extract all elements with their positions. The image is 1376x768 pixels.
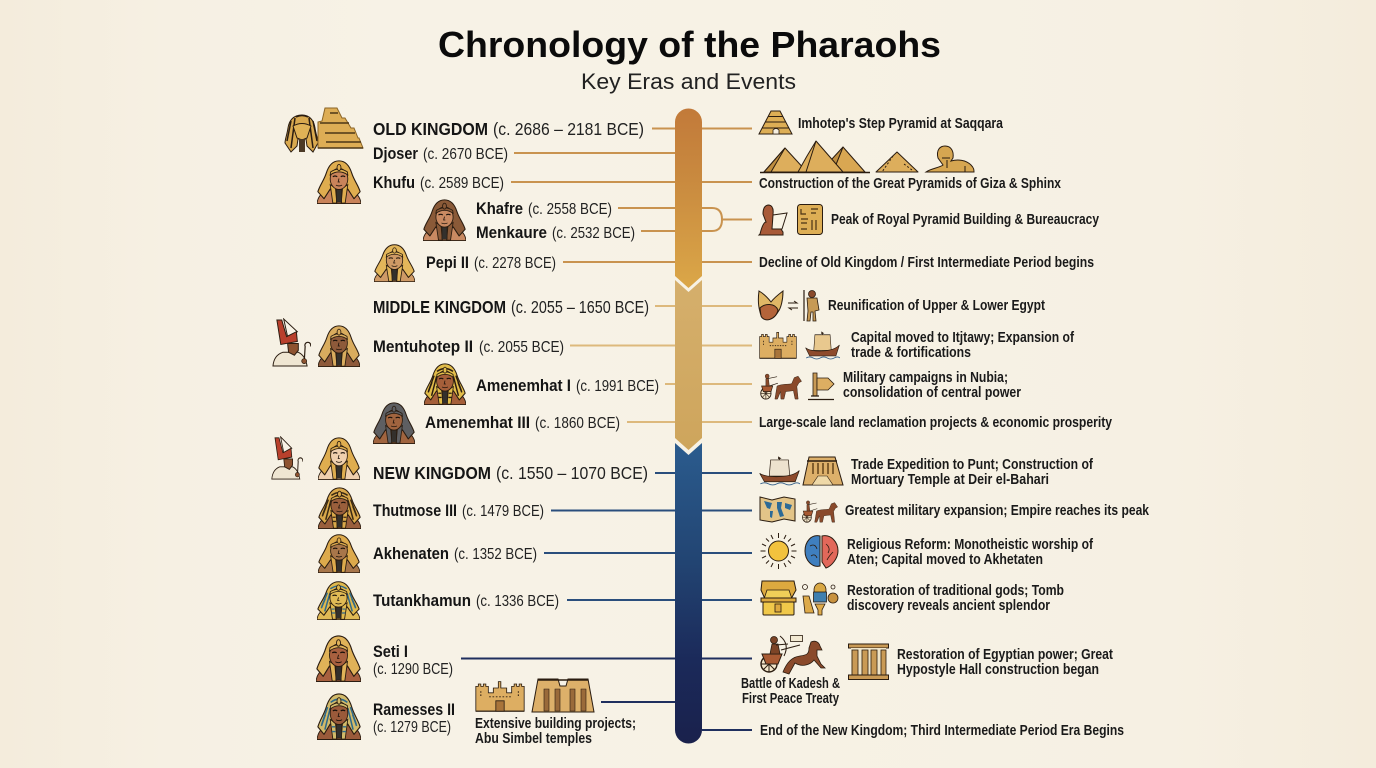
icon: sphinx: [926, 146, 974, 172]
label: Seti I: Seti I: [373, 643, 408, 661]
panel: New Kingdom pharaohs: [272, 437, 648, 747]
label: Pepi II: Pepi II: [426, 254, 469, 272]
label: Menkaure: Menkaure: [476, 224, 547, 242]
event: End of the New Kingdom: End of the New Kingdom; Third Intermediate Period Era Begins: [760, 723, 1124, 739]
icon: chariot attack: [802, 501, 838, 522]
era heading: Middle Kingdom: MIDDLE KINGDOM: [373, 297, 506, 317]
icon: crown figure New Kingdom: [272, 437, 303, 479]
icon: Amenemhat I: [424, 364, 466, 405]
event: Battle of Kadesh: First Peace Treaty: [742, 691, 839, 707]
label: Amenemhat I: [476, 377, 659, 395]
icon: papyrus tablet: [798, 204, 822, 234]
icon: sun: [760, 533, 796, 569]
event: Capital moved: trade & fortifications: [851, 345, 971, 361]
label: Amenemhat I: Amenemhat I: [476, 377, 571, 395]
icon: soldier: [804, 290, 819, 321]
era heading: Middle Kingdom: (c. 2055 – 1650 BCE): [511, 297, 649, 317]
label: Mentuhotep II: (c. 2055 BCE): [479, 339, 564, 356]
bar segment: New Kingdom: [675, 443, 702, 744]
icon: ship: [806, 331, 840, 359]
panel: Old Kingdom pharaohs: [285, 108, 644, 282]
icon: Hatshepsut: [318, 438, 360, 480]
icon: Punt ship: [760, 456, 800, 485]
label: Tutankhamun: (c. 1336 BCE): [476, 593, 559, 610]
icon: Khufu: [317, 161, 361, 204]
panel: Middle Kingdom events: [758, 290, 1112, 431]
label: Khufu: Khufu: [373, 174, 415, 192]
event: Restoration of Egyptian power: [897, 647, 1113, 678]
icon: fort Ramesses: [476, 682, 524, 711]
label: Ramesses II: [373, 701, 455, 736]
label: Khafre: [476, 200, 612, 218]
label: Menkaure: [476, 224, 635, 242]
event: Extensive building projects: Extensive building projects;: [475, 716, 636, 732]
era heading: Old Kingdom: OLD KINGDOM: [373, 119, 488, 139]
label: Seti I: [373, 643, 453, 678]
icon: Khafre: [423, 200, 466, 241]
label: Pepi II: [426, 254, 556, 272]
icon: hypostyle hall: [848, 644, 888, 680]
event: Military campaigns: consolidation of central power: [843, 385, 1021, 401]
label: Amenemhat III: Amenemhat III: [425, 414, 530, 432]
event: Trade Expedition: Trade Expedition to Punt; Construction of: [851, 457, 1093, 473]
era heading: Middle Kingdom: [373, 297, 649, 317]
event: Battle of Kadesh: Battle of Kadesh &: [741, 676, 840, 692]
icon: mortuary temple: [803, 457, 843, 485]
label: Menkaure: (c. 2532 BCE): [552, 225, 635, 242]
icon: treaty tablet: [790, 636, 802, 642]
label: Mentuhotep II: Mentuhotep II: [373, 338, 473, 356]
label: Tutankhamun: [373, 592, 559, 610]
event: Military campaigns: [843, 370, 1021, 401]
event: Peak of Royal Pyramid Building: Peak of Royal Pyramid Building & Bureaucracy: [831, 212, 1099, 228]
panel: Old Kingdom events: [759, 111, 1099, 271]
icon: fort: [760, 332, 796, 358]
icon: Thutmose III: [318, 488, 361, 529]
subtitle: Key Eras and Events: [581, 69, 796, 94]
panel: New Kingdom events: [741, 456, 1149, 739]
label: Seti I: (c. 1290 BCE): [373, 661, 453, 678]
connector lines: Middle Kingdom: [570, 306, 752, 422]
label: Djoser: [373, 145, 508, 163]
label: Amenemhat I: (c. 1991 BCE): [576, 378, 659, 395]
label: Amenemhat III: [425, 414, 620, 432]
label: Khufu: [373, 174, 504, 192]
icon: exchange arrows: [788, 301, 798, 310]
icon: Imhotep step pyramid: [759, 111, 792, 134]
event: Reunification: Reunification of Upper & Lower Egypt: [828, 298, 1045, 314]
event: Restoration of Egyptian power: Hypostyle Hall construction began: [897, 662, 1099, 678]
event: Land reclamation: Large-scale land reclamation projects & economic prosperity: [759, 415, 1112, 431]
event: Greatest military expansion: Greatest military expansion; Empire reaches its peak: [845, 503, 1149, 519]
label: Khufu: (c. 2589 BCE): [420, 175, 504, 192]
event: Restoration of traditional gods: [847, 583, 1064, 614]
event: Great Pyramids: Construction of the Great Pyramids of Giza & Sphinx: [759, 176, 1061, 192]
label: Djoser: (c. 2670 BCE): [423, 146, 508, 163]
icon: step pyramid: [318, 108, 363, 148]
event: Religious Reform: [847, 537, 1093, 568]
label: Tutankhamun: Tutankhamun: [373, 592, 471, 610]
icon: Tutankhamun: [317, 582, 360, 620]
era heading: Old Kingdom: (c. 2686 – 2181 BCE): [493, 119, 644, 139]
event: Religious Reform: Religious Reform: Monotheistic worship of: [847, 537, 1093, 553]
icon: small pyramid: [876, 152, 918, 172]
label: Akhenaten: (c. 1352 BCE): [454, 546, 537, 563]
era heading: New Kingdom: NEW KINGDOM: [373, 463, 491, 483]
event: Restoration of traditional gods: discovery reveals ancient splendor: [847, 598, 1050, 614]
label: Mentuhotep II: [373, 338, 564, 356]
connector lines: late New Kingdom: [461, 658, 752, 730]
icon: artifacts: [802, 583, 838, 615]
icon: Abu Simbel temple: [532, 679, 594, 712]
icon: brain: [805, 536, 838, 568]
bar segment: Old Kingdom: [675, 108, 702, 288]
icon: Pepi II: [374, 245, 415, 282]
event: Trade Expedition: Mortuary Temple at Deir el-Bahari: [851, 472, 1049, 488]
label: Akhenaten: [373, 545, 537, 563]
icon: pyramids of Giza: [760, 141, 870, 172]
era heading: Old Kingdom: [373, 119, 644, 139]
event: Trade Expedition: [851, 457, 1093, 488]
label: Pepi II: (c. 2278 BCE): [474, 255, 556, 272]
event: Capital moved: Capital moved to Itjtawy; Expansion of: [851, 330, 1074, 346]
timeline bar: [675, 108, 702, 744]
icon: Kadesh chariot: [761, 636, 825, 674]
icon: Mentuhotep II: [318, 326, 360, 367]
icon: treasure chest: [761, 581, 796, 615]
label: Khafre: Khafre: [476, 200, 523, 218]
label: Khafre: (c. 2558 BCE): [528, 201, 612, 218]
icon: Amenemhat III: [373, 403, 415, 444]
icon: striped nemes: [285, 115, 318, 152]
label: Thutmose III: [373, 502, 544, 520]
label: Thutmose III: (c. 1479 BCE): [462, 503, 544, 520]
event: Imhotep: Imhotep's Step Pyramid at Saqqara: [798, 116, 1004, 132]
label: Akhenaten: Akhenaten: [373, 545, 449, 563]
icon: chariot: [761, 374, 802, 399]
event: Capital moved: [851, 330, 1074, 361]
panel: Middle Kingdom pharaohs: [273, 297, 659, 444]
event: Restoration of Egyptian power: Restoration of Egyptian power; Great: [897, 647, 1113, 663]
icon: scribe: [759, 205, 787, 235]
icon: Seti I: [316, 636, 361, 682]
icon: Akhenaten: [318, 535, 360, 573]
label: Ramesses II: (c. 1279 BCE): [373, 719, 451, 736]
connector lines: New Kingdom: [544, 473, 752, 600]
event: Extensive building projects: Abu Simbel temples: [475, 731, 592, 747]
icon: crown figure Mentuhotep: [273, 319, 311, 366]
label: Amenemhat III: (c. 1860 BCE): [535, 415, 620, 432]
event: Battle of Kadesh: [741, 676, 840, 707]
bar segment: Middle Kingdom: [675, 280, 702, 450]
icon: signpost: [808, 373, 834, 400]
event: Military campaigns: Military campaigns in Nubia;: [843, 370, 1008, 386]
connector lines: Old Kingdom: [511, 128, 752, 262]
label: Thutmose III: Thutmose III: [373, 502, 457, 520]
label: Ramesses II: Ramesses II: [373, 701, 455, 719]
era heading: New Kingdom: (c. 1550 – 1070 BCE): [496, 463, 648, 483]
event: Religious Reform: Aten; Capital moved to Akhetaten: [847, 552, 1043, 568]
label: Djoser: Djoser: [373, 145, 419, 163]
event: Restoration of traditional gods: Restoration of traditional gods; Tomb: [847, 583, 1064, 599]
icon: world map: [760, 497, 795, 522]
icon: Upper and Lower Egypt: [758, 291, 783, 320]
title: Chronology of the Pharaohs: [438, 24, 941, 65]
era heading: New Kingdom: [373, 463, 648, 483]
event: Extensive building projects: [475, 716, 636, 747]
event: Decline of Old Kingdom: Decline of Old Kingdom / First Intermediate Period begins: [759, 255, 1094, 271]
icon: Ramesses II: [317, 694, 361, 740]
